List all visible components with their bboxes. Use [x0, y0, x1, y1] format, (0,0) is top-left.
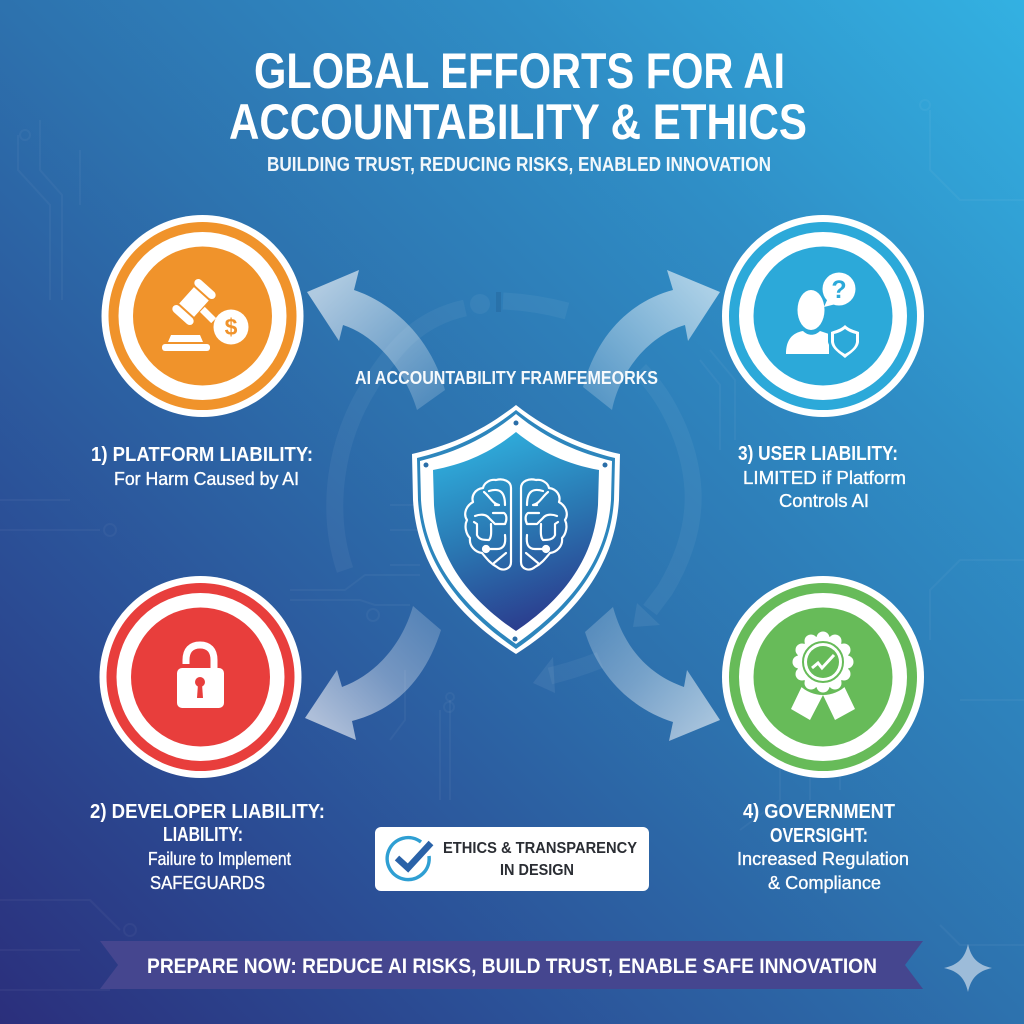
- arrow: to user liability: [583, 270, 720, 410]
- callout: ethics and transparency: ETHICS & TRANSPARENCY: [443, 840, 637, 857]
- heading and text: LIABILITY:: [163, 824, 243, 846]
- heading and text: LIMITED if Platform: [743, 468, 906, 488]
- icon: sparkle star: [944, 944, 992, 992]
- heading and text: [91, 444, 313, 489]
- arrow: to government oversight: [585, 607, 720, 741]
- icon ring: red: [100, 576, 302, 778]
- heading and text: 2) DEVELOPER LIABILITY:: [90, 801, 325, 823]
- heading and text: Failure to Implement: [148, 849, 291, 869]
- icon: gavel and dollar coin: $: [225, 314, 238, 340]
- icon: user, question bubble and shield: ?: [831, 276, 847, 304]
- heading and text: SAFEGUARDS: [150, 873, 265, 893]
- panel: user liability: [722, 215, 924, 511]
- faint framework ring: [335, 301, 693, 676]
- icon: circuit brain: [465, 479, 567, 569]
- framework label: AI ACCOUNTABILITY FRAMFEMEORKS: [355, 368, 658, 388]
- heading and text: [737, 801, 909, 893]
- heading and text: Controls AI: [779, 491, 869, 511]
- title: [229, 43, 807, 150]
- subtitle: BUILDING TRUST, REDUCING RISKS, ENABLED INNOVATION: [267, 153, 771, 176]
- panel: government oversight: [722, 576, 924, 893]
- title: GLOBAL EFFORTS FOR AI: [254, 43, 785, 99]
- title: ACCOUNTABILITY & ETHICS: [229, 94, 807, 150]
- heading and text: [738, 443, 906, 511]
- heading and text: 3) USER LIABILITY:: [738, 443, 898, 465]
- banner: call to action: PREPARE NOW: REDUCE AI RISKS, BUILD TRUST, ENABLE SAFE INNOVATION: [147, 955, 877, 978]
- heading and text: 4) GOVERNMENT: [743, 801, 895, 823]
- icon: open padlock: [177, 645, 224, 708]
- heading and text: For Harm Caused by AI: [114, 469, 299, 489]
- banner: call to action: [100, 941, 923, 989]
- icon: check mark: [387, 838, 431, 880]
- panel: developer liability: [90, 576, 325, 893]
- central shield: [412, 405, 620, 654]
- icon ring: blue: [722, 215, 924, 417]
- icon: gavel and dollar coin: [162, 277, 248, 351]
- heading and text: Increased Regulation: [737, 849, 909, 869]
- icon: user, question bubble and shield: [786, 272, 862, 361]
- heading and text: & Compliance: [768, 873, 881, 893]
- arrow: to platform liability: [307, 270, 445, 410]
- heading and text: OVERSIGHT:: [770, 825, 868, 847]
- callout: ethics and transparency: IN DESIGN: [500, 862, 574, 879]
- icon ring: orange: [102, 215, 304, 417]
- arrow: to developer liability: [305, 606, 441, 740]
- callout: ethics and transparency: [375, 827, 649, 891]
- panel: platform liability: [91, 215, 313, 489]
- icon ring: green: [722, 576, 924, 778]
- faint arrowheads and mark: [470, 292, 660, 693]
- icon: award rosette with check: [790, 629, 856, 720]
- heading and text: [90, 801, 325, 893]
- heading and text: 1) PLATFORM LIABILITY:: [91, 444, 313, 466]
